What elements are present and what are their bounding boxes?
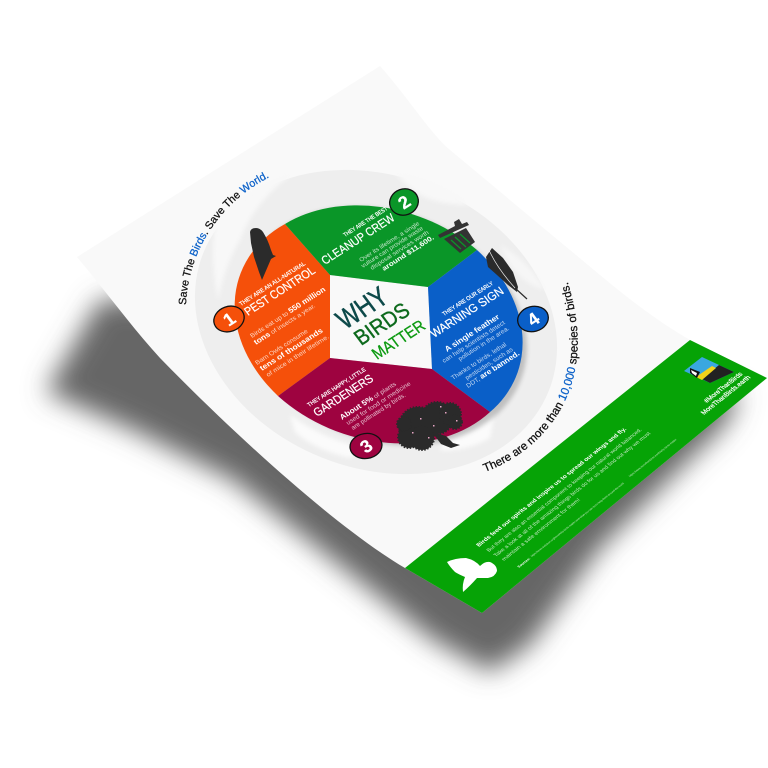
badge 4: 4 — [523, 309, 544, 330]
wheel shadow — [203, 165, 563, 487]
pest control text — [239, 261, 331, 379]
warning sign text: pollution in the area. — [457, 325, 511, 363]
wheel — [203, 165, 563, 487]
gardeners text — [307, 367, 413, 432]
cleanup crew text: disposal services worth — [370, 230, 430, 272]
footer text: https://www.morethanbirds.earth/why-birds-matter — [628, 438, 678, 478]
grey globe ring — [149, 118, 603, 526]
gardeners text: are pollinated by birds. — [350, 392, 407, 432]
gardeners text: THEY ARE HAPPY, LITTLE — [307, 367, 368, 409]
icon: trash can — [438, 219, 475, 253]
badge 1 — [210, 302, 248, 336]
cleanup crew text: vulture can provide waste — [361, 226, 425, 270]
panel: cleanup crew — [285, 205, 477, 287]
badge 2: 2 — [394, 192, 415, 213]
icon: woodpecker — [250, 228, 276, 280]
warning sign text: DDT, are banned. — [464, 349, 521, 390]
pest control text: of mice in their lifetime. — [265, 333, 331, 379]
warning sign text: THEY ARE OUR EARLY — [442, 281, 495, 318]
gardeners text: About 5% of plants — [338, 379, 398, 422]
cleanup crew text — [318, 206, 436, 273]
footer text: But they are also an essential component to keeping our natural world balanced. — [486, 427, 644, 553]
pest control text: THEY ARE AN ALL-NATURAL — [239, 261, 308, 308]
title: why birds matter — [330, 281, 429, 363]
footer text: https://www.audubon.org/news/why-birds-matter-and-what-you-can-do-to-help-them-around-the-world — [530, 482, 625, 558]
title: why birds matter: WHY — [330, 281, 394, 335]
badge 3: 3 — [356, 436, 377, 457]
footer text: Take a look at all of the amazing things birds do for us and find out why we must — [493, 431, 653, 558]
footer text: Sources: — [517, 557, 532, 569]
cleanup crew text: Over its lifetime, a single — [359, 221, 422, 264]
title: why birds matter: BIRDS — [349, 298, 415, 350]
warning sign text: Thanks to birds, lethal — [450, 342, 508, 382]
hashtag and site: MoreThanBirds.earth — [700, 375, 753, 416]
warning sign text: pesticides, such as — [464, 346, 515, 382]
badge 3 — [348, 431, 384, 461]
slogan: save the birds: Save The Birds. Save The World. — [178, 172, 269, 304]
warning sign text — [427, 281, 521, 390]
warning sign text: WARNING SIGN — [427, 284, 507, 340]
cleanup crew text: around $11,600. — [381, 235, 436, 273]
panel: pest control — [235, 224, 331, 396]
panel: gardeners — [278, 358, 490, 443]
badge 4 — [515, 303, 551, 335]
pest control text: Birds eat up to 550 million — [248, 285, 328, 340]
gardeners text: GARDENERS — [310, 372, 376, 419]
logo — [684, 357, 734, 383]
footer text: Birds feed our spirits and inspire us to spread our wings and fly. — [475, 426, 629, 548]
title: why birds matter: MATTER — [369, 317, 429, 363]
cleanup crew text: CLEANUP CREW — [318, 211, 398, 267]
gardeners text: used for food or medicine — [345, 380, 413, 427]
centre panel — [330, 275, 432, 369]
icon: feather — [486, 248, 527, 299]
warning sign text: can help scientists detect — [441, 319, 507, 365]
hashtag and site: #MoreThanBirds — [703, 371, 745, 404]
green footer band — [405, 340, 767, 613]
badge 1: 1 — [219, 309, 240, 330]
icon: tree — [397, 402, 462, 450]
footer text: maintain a safe environment for them! — [501, 497, 583, 562]
pest control text: Barn Owls consume — [254, 328, 310, 367]
poster sheet — [77, 66, 767, 613]
badge 2 — [386, 185, 422, 219]
slogan: more than 10,000 species: There are more than 10,000 species of birds. — [482, 282, 580, 471]
panel: warning sign — [427, 250, 523, 412]
pest control text: tons of insects a year. — [252, 301, 317, 347]
pest control text: PEST CONTROL — [241, 263, 318, 318]
icon: white bird — [447, 558, 497, 592]
warning sign text: A single feather — [443, 312, 501, 354]
pest control text: tens of thousands — [258, 326, 325, 373]
cleanup crew text: THEY ARE THE BEST — [343, 206, 389, 239]
paper drop shadow — [46, 300, 740, 672]
